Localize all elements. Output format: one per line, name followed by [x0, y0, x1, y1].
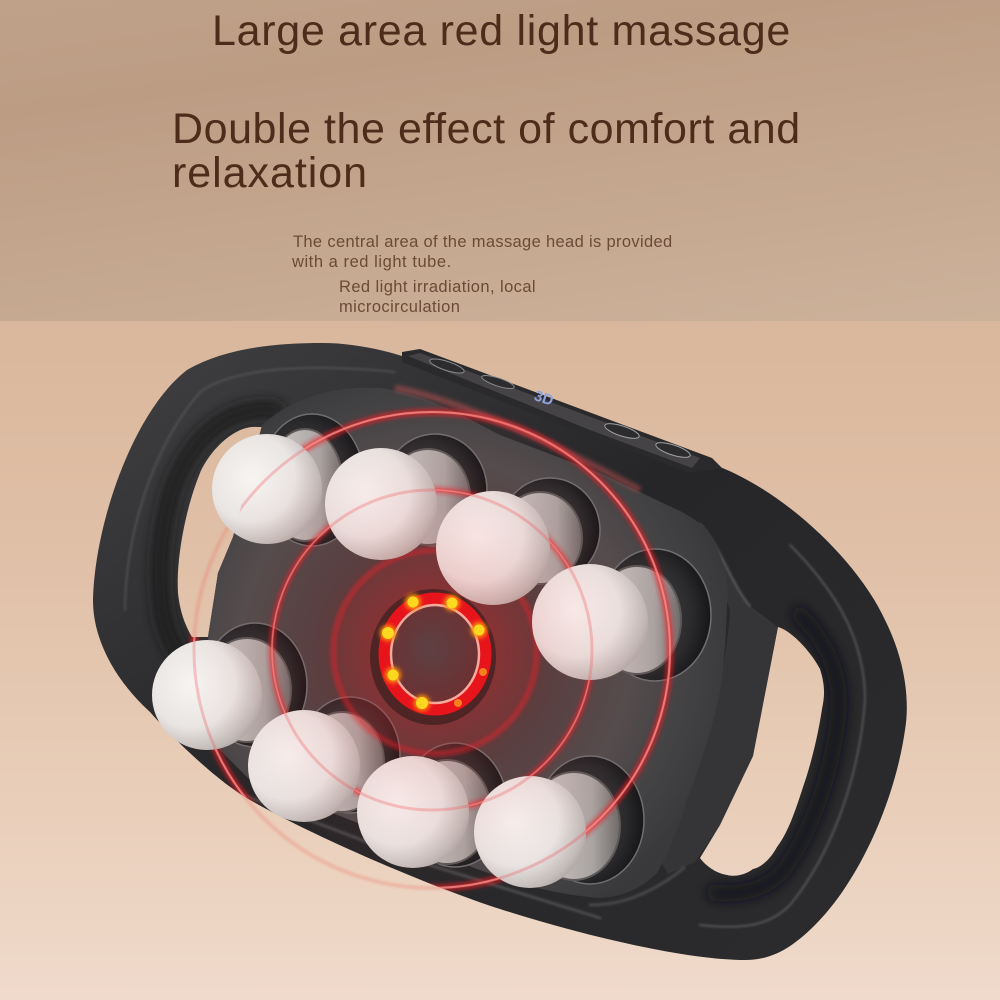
control panel strip — [402, 349, 722, 473]
subheading: double the effect — [172, 105, 801, 197]
text block: irradiation description: microcirculation — [339, 298, 460, 316]
faint outer light ring on background — [194, 412, 670, 888]
pink light streak along rim — [395, 388, 640, 490]
background: upper band — [0, 0, 1000, 321]
central red light ring — [370, 589, 496, 725]
text block: irradiation description: Red light irradiation, local — [339, 278, 536, 296]
text block: red light tube description — [292, 233, 673, 271]
handle grooves and highlights — [125, 368, 865, 927]
socket cylinders — [203, 429, 681, 880]
LED glow — [380, 594, 487, 711]
LED dots — [382, 596, 487, 709]
ball sockets — [203, 414, 711, 884]
socket rings — [203, 414, 711, 884]
massager illustration — [93, 343, 907, 960]
subheading: double the effect: relaxation — [172, 149, 368, 197]
central red light halo disc — [333, 550, 537, 754]
text block: irradiation description — [339, 278, 536, 316]
device inner plate — [205, 388, 728, 898]
control panel strip: 3D — [532, 387, 556, 410]
faint rings over balls — [194, 412, 670, 888]
text block: red light tube description: The central area of the massage head is provided — [293, 233, 673, 251]
ring glows — [194, 412, 670, 888]
background: lower band — [0, 321, 1000, 1000]
massage balls — [152, 434, 648, 888]
ring cores — [194, 412, 670, 888]
heading: large area red light massage: Large area red light massage — [212, 7, 791, 55]
red tint over device — [253, 472, 608, 826]
subheading: double the effect: Double the effect of comfort and — [172, 105, 801, 153]
red light rings — [194, 412, 670, 888]
text block: red light tube description: with a red light tube. — [292, 253, 452, 271]
device body with handle openings — [93, 343, 907, 960]
